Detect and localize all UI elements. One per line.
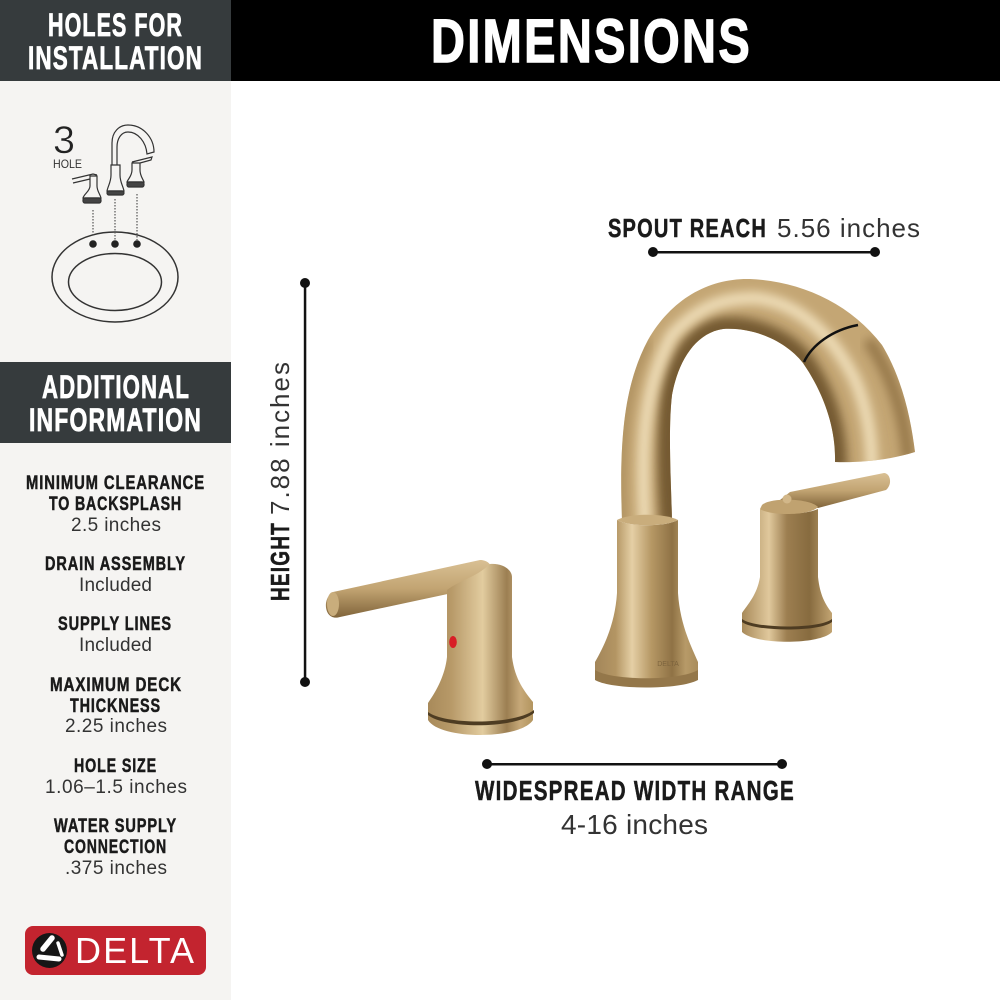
heading: additional information [0, 362, 231, 443]
faucet: spout [621, 279, 915, 525]
icon: three hole faucet and sink diagram: HOLE [53, 157, 82, 171]
faucet: spout base [595, 515, 698, 688]
spout reach label [608, 213, 920, 243]
text block: supply lines: Included [79, 635, 152, 656]
text block: minimum clearance: 2.5 inches [71, 515, 161, 536]
width label [475, 775, 795, 840]
height label: 7.88 inches [265, 362, 295, 515]
text block: maximum deck thickness: THICKNESS [70, 696, 161, 717]
heading: additional information: INFORMATION [29, 402, 202, 438]
text block: water supply connection [54, 816, 177, 879]
text block: supply lines: SUPPLY LINES [58, 614, 172, 635]
heading: holes for installation: INSTALLATION [28, 40, 203, 76]
text block: supply lines [58, 614, 172, 656]
heading: additional information: ADDITIONAL [42, 369, 190, 405]
text block: drain assembly: Included [79, 575, 152, 596]
text block: drain assembly: DRAIN ASSEMBLY [45, 554, 186, 575]
logo: delta [25, 926, 206, 975]
text block: drain assembly [45, 554, 186, 596]
heading: dimensions [231, 0, 1000, 81]
text block: hole size: 1.06–1.5 inches [45, 777, 187, 798]
text block: water supply connection: .375 inches [65, 858, 167, 879]
text block: minimum clearance [26, 473, 205, 536]
spout reach label: 5.56 inches [777, 213, 920, 243]
width label: WIDESPREAD WIDTH RANGE [475, 775, 795, 806]
arrow: width dimension line [482, 759, 787, 769]
text block: hole size [45, 756, 187, 798]
heading: holes for installation [0, 0, 231, 81]
spout reach label: SPOUT REACH [608, 213, 767, 243]
text block: minimum clearance: TO BACKSPLASH [49, 494, 182, 515]
height label: HEIGHT [265, 522, 295, 601]
faucet: spout base: DELTA [657, 661, 679, 668]
faucet: right handle [742, 473, 890, 642]
icon: three hole faucet and sink diagram: 3 [53, 119, 75, 162]
sidebar panel [0, 81, 231, 1000]
icon: red hot indicator [449, 636, 457, 648]
text block: maximum deck thickness: MAXIMUM DECK [50, 675, 182, 696]
arrow: spout reach dimension line [648, 247, 880, 257]
faucet: left handle [326, 560, 534, 735]
text block: maximum deck thickness [50, 675, 182, 737]
logo: delta: DELTA [75, 930, 194, 971]
icon: three hole faucet and sink diagram [52, 119, 178, 322]
text block: water supply connection: CONNECTION [64, 837, 167, 858]
text block: hole size: HOLE SIZE [74, 756, 157, 777]
text block: maximum deck thickness: 2.25 inches [65, 716, 167, 737]
arrow: height dimension line [300, 278, 310, 687]
width label: 4-16 inches [561, 809, 708, 840]
heading: holes for installation: HOLES FOR [48, 7, 183, 43]
height label [265, 362, 295, 601]
heading: dimensions: DIMENSIONS [431, 7, 752, 75]
text block: water supply connection: WATER SUPPLY [54, 816, 177, 837]
text block: minimum clearance: MINIMUM CLEARANCE [26, 473, 205, 494]
